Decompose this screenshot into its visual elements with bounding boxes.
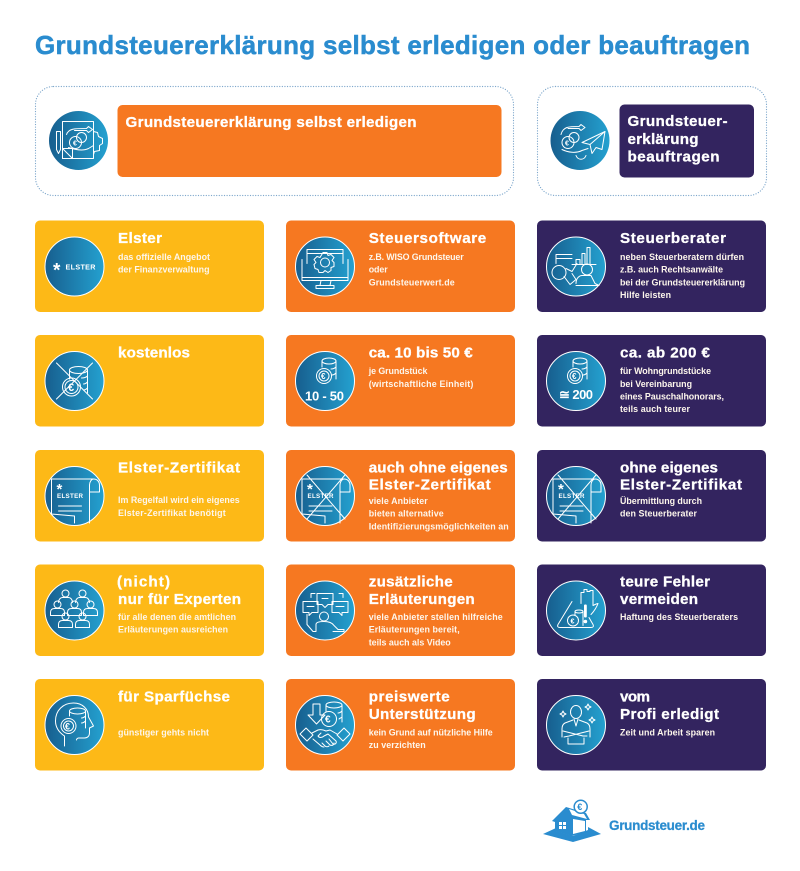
panel: vom Profi erledigt bbox=[537, 679, 766, 770]
panel: nur für Experten: (nicht) bbox=[117, 574, 170, 590]
panel: vom Profi erledigt: vom bbox=[620, 688, 650, 706]
panel: ca. 10 bis 50 €: je Grundstück bbox=[368, 366, 427, 376]
icon: no Elster certificate: * bbox=[307, 481, 313, 498]
icon: Elster certificate: ELSTER bbox=[57, 493, 84, 500]
panel: auch ohne eigenes Elster-Zertifikat: auch ohne eigenes bbox=[369, 460, 508, 476]
panel: auch ohne eigenes Elster-Zertifikat: bieten alternative bbox=[369, 508, 444, 518]
panel: nur für Experten bbox=[35, 564, 264, 656]
panel: Elster: der Finanzverwaltung bbox=[118, 264, 210, 274]
icon: 10 - 50 bbox=[296, 352, 354, 410]
panel: für Sparfüchse: für Sparfüchse bbox=[118, 688, 230, 706]
icon: no Elster certificate bbox=[546, 466, 606, 526]
panel: ca. 10 bis 50 € bbox=[286, 335, 515, 426]
icon: beauftragen bbox=[550, 111, 610, 170]
panel: selbst erledigen header bbox=[36, 86, 514, 196]
icon: 200: € bbox=[572, 372, 577, 381]
panel: teure Fehler vermeiden: vermeiden bbox=[620, 591, 698, 608]
panel: auch ohne eigenes Elster-Zertifikat: viele Anbieter bbox=[369, 496, 428, 506]
panel: ca. ab 200 €: eines Pauschalhonorars, bbox=[620, 392, 724, 402]
icon: Elster logo bbox=[45, 237, 104, 296]
panel: Steuersoftware: oder bbox=[369, 264, 388, 274]
icon: no Elster certificate: ELSTER bbox=[558, 493, 585, 500]
icon: Elster logo: ELSTER bbox=[66, 262, 96, 272]
panel: ca. ab 200 €: für Wohngrundstücke bbox=[620, 366, 711, 376]
box: selbst erledigen: Grundsteuererklärung selbst erledigen bbox=[126, 114, 416, 131]
panel: zusätzliche Erläuterungen: Erläuterungen bereit, bbox=[369, 624, 460, 634]
icon: 10 - 50: 10 - 50 bbox=[305, 388, 344, 404]
icon: 200: ≅ 200 bbox=[559, 387, 593, 402]
panel: preiswerte Unterstützung: zu verzichten bbox=[369, 740, 426, 750]
panel: Steuerberater: neben Steuerberatern dürfen bbox=[620, 252, 744, 262]
panel: ca. 10 bis 50 €: ca. 10 bis 50 € bbox=[369, 344, 473, 362]
icon: house with euro coin: € bbox=[577, 802, 582, 812]
panel: Elster: das offizielle Angebot bbox=[118, 252, 210, 262]
panel: zusätzliche Erläuterungen bbox=[286, 564, 515, 656]
panel: Elster-Zertifikat bbox=[35, 450, 264, 542]
panel: Elster-Zertifikat: Elster-Zertifikat benötigt bbox=[118, 508, 226, 518]
box: selbst erledigen bbox=[118, 105, 502, 177]
panel: nur für Experten: für alle denen die amtlichen bbox=[118, 612, 236, 622]
panel: kostenlos bbox=[35, 335, 264, 426]
panel: für Sparfüchse: günstiger gehts nicht bbox=[118, 728, 209, 738]
panel: Steuersoftware: Grundsteuerwert.de bbox=[369, 278, 455, 288]
icon: head with coins: € bbox=[65, 722, 70, 732]
panel: preiswerte Unterstützung bbox=[286, 679, 515, 770]
panel: Steuerberater: bei der Grundsteuererklärung bbox=[620, 278, 745, 288]
box: beauftragen: erklärung bbox=[628, 131, 698, 148]
panel: ca. 10 bis 50 €: (wirtschaftliche Einheit) bbox=[369, 379, 473, 389]
icon: head with coins bbox=[45, 696, 104, 754]
icon: kostenlos: € bbox=[68, 382, 74, 394]
panel: beauftragen header bbox=[538, 86, 766, 196]
icon: kostenlos bbox=[45, 352, 104, 410]
panel: preiswerte Unterstützung: kein Grund auf nützliche Hilfe bbox=[369, 728, 493, 738]
panel: ca. ab 200 €: bei Vereinbarung bbox=[620, 379, 692, 389]
panel: ohne eigenes Elster-Zertifikat: Übermittlung durch bbox=[620, 496, 702, 506]
panel: Elster: Elster bbox=[118, 230, 162, 247]
panel: Steuerberater bbox=[537, 220, 766, 312]
panel: zusätzliche Erläuterungen: teils auch als Video bbox=[369, 638, 451, 648]
box: beauftragen: Grundsteuer- bbox=[628, 113, 728, 130]
panel: ca. ab 200 €: teils auch teurer bbox=[620, 404, 691, 414]
panel: auch ohne eigenes Elster-Zertifikat: Identifizierungsmöglichkeiten an bbox=[369, 522, 509, 532]
icon: Elster certificate: * bbox=[56, 481, 62, 498]
icon: Elster logo: * bbox=[53, 260, 61, 282]
icon: house with euro coin bbox=[543, 800, 601, 842]
icon: speech bubbles bbox=[296, 581, 354, 640]
panel: teure Fehler vermeiden: Haftung des Steuerberaters bbox=[620, 612, 738, 622]
panel: kostenlos: kostenlos bbox=[118, 344, 190, 362]
icon: Steuersoftware bbox=[296, 237, 354, 296]
panel: für Sparfüchse bbox=[35, 679, 264, 770]
panel: Elster bbox=[35, 220, 264, 312]
panel: Steuersoftware bbox=[286, 220, 515, 312]
icon: selbst erledigen bbox=[49, 111, 108, 170]
panel: preiswerte Unterstützung: Unterstützung bbox=[369, 706, 476, 723]
panel: zusätzliche Erläuterungen: zusätzliche bbox=[369, 574, 453, 590]
box: beauftragen bbox=[620, 104, 754, 178]
panel: ohne eigenes Elster-Zertifikat: ohne eigenes bbox=[620, 460, 718, 476]
icon: Elster certificate bbox=[45, 466, 104, 526]
icon: warning with hand bbox=[546, 581, 606, 640]
panel: Elster-Zertifikat: Im Regelfall wird ein eigenes bbox=[118, 495, 240, 505]
panel: nur für Experten: Erläuterungen ausreichen bbox=[118, 624, 228, 634]
logo: Grundsteuer.de bbox=[543, 800, 705, 842]
panel: nur für Experten: nur für Experten bbox=[118, 591, 241, 608]
panel: auch ohne eigenes Elster-Zertifikat bbox=[286, 450, 515, 542]
panel: vom Profi erledigt: Zeit und Arbeit sparen bbox=[620, 728, 715, 738]
panel: Elster-Zertifikat: Elster-Zertifikat bbox=[118, 460, 240, 476]
panel: ohne eigenes Elster-Zertifikat: den Steuerberater bbox=[620, 508, 698, 518]
icon: professional bbox=[546, 696, 606, 754]
icon: handshake and coins: € bbox=[325, 714, 331, 726]
icon: Steuerberater bbox=[546, 237, 606, 296]
title: Grundsteuererklärung selbst erledigen oder beauftragen bbox=[35, 30, 750, 60]
box: beauftragen: beauftragen bbox=[628, 148, 720, 166]
panel: Steuerberater: z.B. auch Rechtsanwälte bbox=[620, 264, 723, 274]
panel: zusätzliche Erläuterungen: viele Anbieter stellen hilfreiche bbox=[369, 612, 503, 622]
icon: handshake and coins bbox=[296, 696, 354, 754]
panel: zusätzliche Erläuterungen: Erläuterungen bbox=[369, 591, 475, 608]
icon: no Elster certificate: ELSTER bbox=[308, 493, 334, 500]
icon: 10 - 50: € bbox=[321, 372, 326, 381]
panel: teure Fehler vermeiden bbox=[537, 564, 766, 656]
logo: Grundsteuer.de: Grundsteuer.de bbox=[609, 818, 705, 833]
icon: no Elster certificate bbox=[296, 466, 354, 526]
panel: ohne eigenes Elster-Zertifikat bbox=[537, 450, 766, 542]
panel: Steuerberater: Hilfe leisten bbox=[620, 290, 671, 300]
icon: beauftragen: € bbox=[565, 140, 569, 148]
panel: Steuersoftware: z.B. WISO Grundsteuer bbox=[369, 252, 464, 262]
panel: teure Fehler vermeiden: teure Fehler bbox=[620, 574, 710, 590]
panel: Steuersoftware: Steuersoftware bbox=[369, 230, 486, 247]
panel: ca. ab 200 € bbox=[537, 335, 766, 426]
icon: 200 bbox=[546, 352, 606, 410]
panel: Steuerberater: Steuerberater bbox=[620, 230, 726, 247]
icon: group of people bbox=[45, 581, 104, 640]
panel: ca. ab 200 €: ca. ab 200 € bbox=[620, 344, 711, 362]
panel: preiswerte Unterstützung: preiswerte bbox=[369, 688, 450, 706]
icon: selbst erledigen: € bbox=[73, 140, 77, 148]
icon: no Elster certificate: * bbox=[558, 481, 564, 498]
panel: vom Profi erledigt: Profi erledigt bbox=[620, 706, 719, 723]
panel: ohne eigenes Elster-Zertifikat: Elster-Zertifikat bbox=[620, 476, 742, 494]
icon: warning with hand: € bbox=[570, 618, 574, 626]
panel: auch ohne eigenes Elster-Zertifikat: Elster-Zertifikat bbox=[369, 476, 491, 494]
